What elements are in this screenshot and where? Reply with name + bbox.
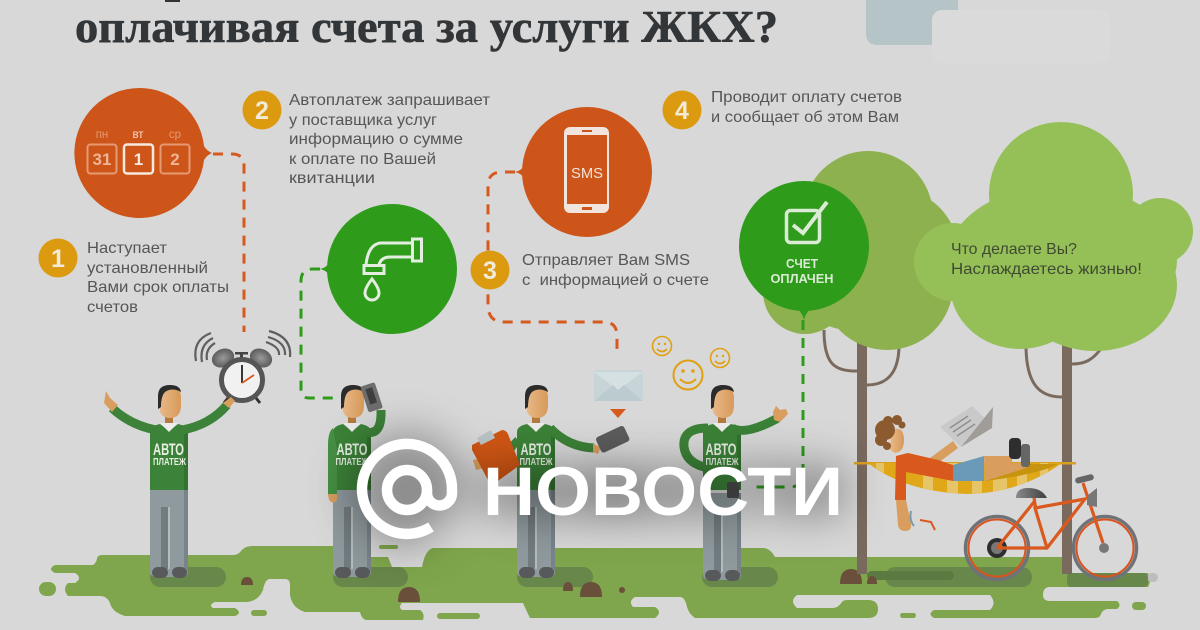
SMS circle	[515, 107, 652, 237]
saddle	[1016, 488, 1047, 498]
step 4 badge	[662, 90, 702, 130]
step 1 text: установленный	[87, 260, 208, 277]
calendar days: пн	[96, 129, 108, 141]
person 4	[684, 385, 788, 581]
step 2 badge	[242, 90, 282, 130]
trees	[763, 122, 1193, 574]
icon: phone at ear	[360, 382, 383, 412]
arm	[550, 428, 594, 448]
calendar days	[88, 129, 190, 174]
sweater label: ПЛАТЕЖ	[153, 457, 187, 468]
calendar days: ср	[169, 129, 181, 141]
sweater label	[153, 440, 187, 468]
arm and book	[930, 441, 958, 463]
wordmark: НОВОСТИ	[483, 453, 843, 530]
arms	[328, 428, 337, 495]
step 1 text: Вами срок оплаты	[87, 279, 229, 296]
step 1 badge	[38, 238, 78, 278]
sweater label	[706, 440, 739, 468]
reader body	[895, 453, 953, 500]
person 2	[328, 382, 383, 578]
tree text	[951, 241, 1142, 278]
sweater label: АВТО	[153, 440, 184, 459]
icon: phone in hand	[595, 425, 630, 453]
sweater label	[520, 440, 553, 468]
step 4 text	[711, 89, 902, 126]
icon: phone in pocket	[727, 482, 739, 498]
calendar days: вт	[132, 129, 144, 141]
step 3 badge	[470, 250, 510, 290]
head	[890, 429, 904, 453]
calendar circle	[74, 88, 212, 218]
person 3	[472, 385, 630, 578]
step 1 text: Наступает	[87, 240, 168, 257]
step 3 text	[522, 252, 709, 289]
step 2 text: у поставщика услуг	[289, 112, 437, 129]
tap circle	[320, 204, 457, 334]
shorts	[953, 456, 984, 481]
logo: @ НОВОСТИ	[362, 444, 843, 534]
tree text: Наслаждаетесь жизнью!	[951, 261, 1142, 278]
icon: alarm clock	[195, 331, 290, 403]
step 3 text: Отправляет Вам SMS	[522, 252, 690, 269]
legs	[984, 456, 1026, 481]
sweater label: ПЛАТЕЖ	[520, 457, 553, 468]
lamp	[1087, 488, 1097, 507]
sweater label: АВТО	[520, 440, 552, 459]
step 3 text: с информацией о счете	[522, 272, 709, 289]
step 2 text	[289, 92, 491, 187]
sweater label: АВТО	[706, 440, 736, 459]
decorative top-right panel	[866, 0, 1110, 63]
step 2 text: квитанции	[289, 170, 375, 187]
tree 2 trunk and branches	[1026, 340, 1100, 574]
icon: smileys	[652, 336, 730, 390]
arrow: down to phone	[610, 409, 626, 418]
step 1 text	[87, 240, 229, 316]
sweater label: ПЛАТЕЖ	[336, 457, 369, 468]
tree 1 crown	[763, 151, 958, 350]
arms	[112, 405, 227, 430]
sweater label: ПЛАТЕЖ	[706, 457, 739, 468]
ground	[39, 545, 1158, 620]
step 4 text: и сообщает об этом Вам	[711, 109, 899, 126]
sweater label	[336, 440, 369, 468]
dashed connector: paid to person 4	[752, 320, 803, 487]
paid circle: СЧЕТ	[786, 257, 818, 271]
hand	[773, 406, 788, 422]
tree 1 trunk and branches	[824, 330, 899, 574]
dashed connector: SMS to envelope	[488, 172, 617, 354]
dashed connector: tap to person 2	[301, 269, 338, 398]
paid circle: ОПЛАЧЕН	[770, 272, 834, 286]
shoes	[1009, 438, 1021, 459]
step 1 badge: 1	[51, 245, 65, 273]
step 4 badge: 4	[675, 97, 689, 125]
rocks	[241, 569, 877, 602]
hands	[104, 391, 118, 412]
icon: clipboard	[472, 430, 520, 483]
paid circle	[739, 181, 869, 320]
step 3 badge: 3	[483, 257, 497, 285]
arms	[732, 418, 778, 430]
icon: check box	[786, 202, 827, 242]
sweater label: АВТО	[336, 440, 368, 459]
dashed connector: calendar to clock	[213, 154, 244, 332]
handlebar	[1075, 474, 1094, 484]
bicycle	[966, 474, 1136, 580]
title: оплачивая счета за услуги ЖКХ?	[75, 2, 778, 52]
step 1 text: счетов	[87, 299, 138, 316]
tree text: Что делаете Вы?	[951, 241, 1077, 258]
step 2 text: Автоплатеж запрашивает	[289, 92, 491, 109]
icon: smartphone: SMS	[571, 165, 603, 182]
icon: at sign	[362, 444, 452, 534]
calendar days: 1	[134, 150, 143, 169]
calendar days: 31	[93, 150, 111, 169]
step 2 text: информацию о сумме	[289, 131, 463, 148]
step 2 badge: 2	[255, 97, 269, 125]
calendar days: 2	[170, 150, 180, 169]
step 2 text: к оплате по Вашей	[289, 151, 436, 168]
hammock with reader	[854, 406, 1076, 531]
step 4 text: Проводит оплату счетов	[711, 89, 902, 106]
envelope	[594, 370, 643, 401]
person 1	[104, 385, 235, 578]
icon: water tap	[364, 239, 422, 300]
tree 2 crown	[914, 122, 1193, 351]
